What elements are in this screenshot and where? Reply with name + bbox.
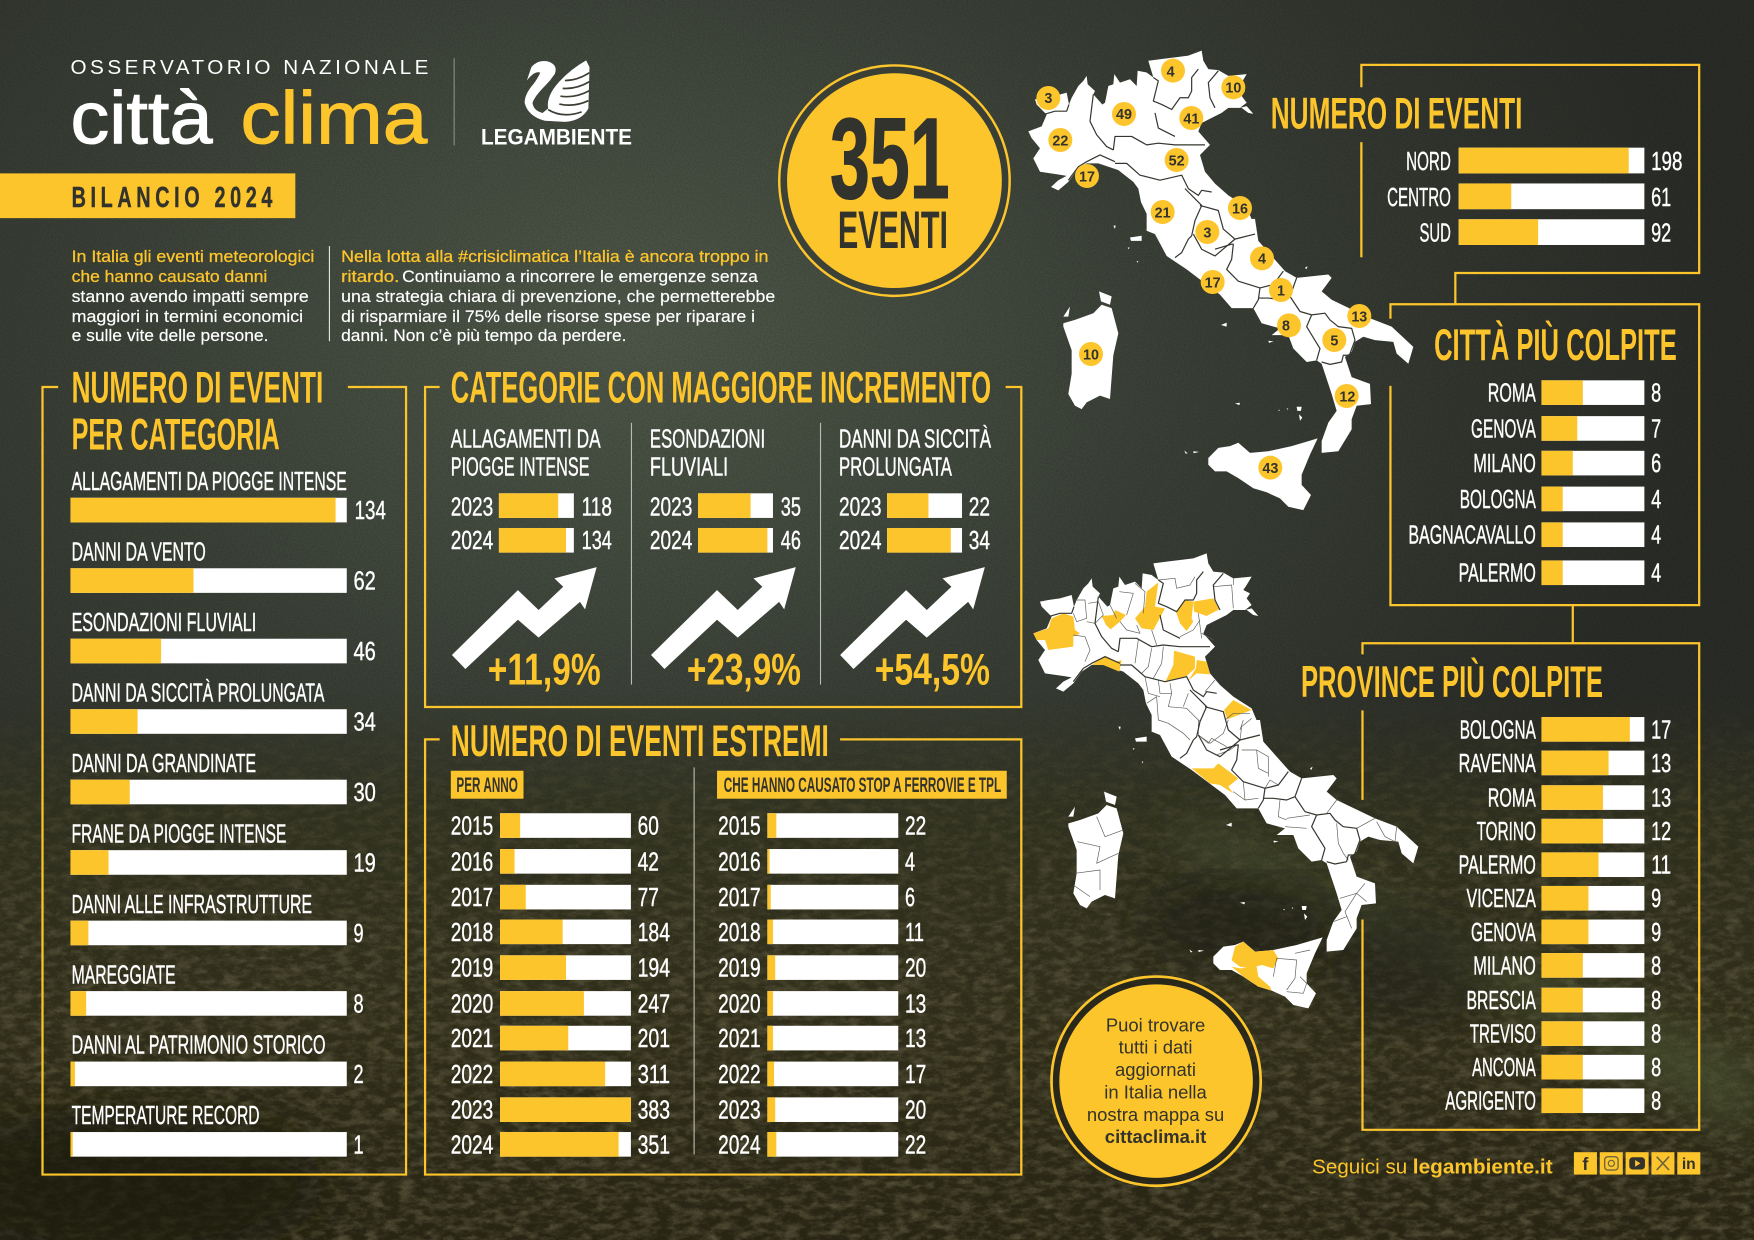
logo: Legambiente: LEGAMBIENTE <box>481 124 632 149</box>
callout: mappa cittaclima.it: cittaclima.it <box>1105 1126 1206 1147</box>
markers: 10 <box>1083 347 1099 363</box>
Sardinia <box>1068 792 1123 908</box>
bar: roma <box>1488 785 1671 813</box>
bar: allagamenti <box>70 468 386 525</box>
bar: vicenza <box>1467 885 1661 913</box>
social icons: in <box>1682 1156 1696 1173</box>
bar: palermo: 4 <box>1651 560 1661 588</box>
text block: intro right: ritardo. <box>341 268 399 286</box>
chart: eventi per anno: 311 <box>638 1061 670 1089</box>
column: esondazioni: 46 <box>781 527 801 555</box>
province borders south <box>1198 720 1397 993</box>
column: allagamenti: 118 <box>582 494 612 522</box>
chart: eventi per anno: 2019 <box>451 955 493 983</box>
arrow <box>840 567 985 669</box>
bar: frane <box>70 820 376 877</box>
chart: stop ferrovie e TPL: 2019 <box>718 955 761 983</box>
markers <box>1036 59 1371 480</box>
panel: numero di eventi per categoria <box>43 363 406 1175</box>
bar: roma <box>1488 380 1661 408</box>
bar: patrimonio storico: DANNI AL PATRIMONIO STORICO <box>72 1032 326 1060</box>
region borders south <box>1220 745 1360 864</box>
bar: ravenna: RAVENNA <box>1459 750 1536 778</box>
bar: centro: CENTRO <box>1387 184 1451 212</box>
text block: intro right: di risparmiare il 75% delle risorse spese per riparare i <box>341 308 755 326</box>
bar: mareggiate: MAREGGIATE <box>72 961 176 989</box>
text block: intro left: che hanno causato danni <box>72 268 267 286</box>
chart: eventi per anno: 77 <box>638 884 659 912</box>
bar: genova: 7 <box>1651 415 1661 443</box>
bar: nord: 198 <box>1651 148 1682 176</box>
markers: 12 <box>1339 389 1355 405</box>
tag: stop ferrovie <box>717 771 1007 799</box>
column: allagamenti: +11,9% <box>488 645 601 695</box>
chart: eventi per anno: 60 <box>638 812 659 840</box>
bar: palermo: PALERMO <box>1459 560 1536 588</box>
column: esondazioni: FLUVIALI <box>650 453 728 481</box>
heading: NUMERO DI EVENTI <box>72 363 323 413</box>
bar: siccità: 34 <box>353 708 376 736</box>
bar: palermo <box>1459 852 1671 880</box>
chart: stop ferrovie e TPL: 2018 <box>718 919 761 947</box>
column: siccità: +54,5% <box>875 645 990 695</box>
logo: Osservatorio Nazionale Città Clima: città <box>70 77 214 160</box>
bar: sud <box>1420 219 1671 248</box>
banner: Bilancio 2024 <box>0 173 295 218</box>
bar: mareggiate <box>70 961 364 1018</box>
bar: infrastrutture: 9 <box>353 920 364 948</box>
text block: intro left <box>72 248 314 345</box>
chart: eventi per anno: 2024 <box>451 1131 493 1159</box>
callout: mappa cittaclima.it <box>1052 977 1261 1186</box>
chart: stop ferrovie e TPL: 2020 <box>718 990 761 1018</box>
chart: eventi per anno: 383 <box>638 1097 670 1125</box>
heading: NUMERO DI EVENTI ESTREMI <box>451 716 829 766</box>
chart: stop ferrovie e TPL: 17 <box>905 1061 926 1089</box>
mainland south <box>1152 720 1418 952</box>
bar: bologna: BOLOGNA <box>1460 716 1536 744</box>
province borders Sardinia <box>1073 817 1123 897</box>
callout: mappa cittaclima.it: tutti i dati <box>1119 1037 1192 1058</box>
bar: esondazioni: 46 <box>353 638 376 666</box>
heading <box>72 363 323 460</box>
bar: milano: MILANO <box>1473 952 1536 980</box>
chart: eventi per anno: 184 <box>638 919 670 947</box>
highlighted provinces Sicily <box>1232 942 1278 991</box>
bar: vento: DANNI DA VENTO <box>72 538 206 566</box>
bar: bologna: 17 <box>1651 716 1671 744</box>
column: siccità <box>839 424 992 695</box>
chart: eventi per anno <box>451 812 670 1159</box>
bar: palermo: 11 <box>1651 852 1671 880</box>
bar: frane: 19 <box>353 849 376 877</box>
footer: seguici su: Seguici su <box>1312 1156 1407 1178</box>
column: siccità: 34 <box>969 527 990 555</box>
bar: brescia <box>1467 987 1661 1015</box>
markers: 21 <box>1155 205 1171 221</box>
text block: intro right: danni. Non c’è più tempo da perdere. <box>341 327 626 345</box>
chart: eventi per anno: 194 <box>638 955 670 983</box>
chart: stop ferrovie e TPL: 11 <box>905 919 924 947</box>
bar: genova: 9 <box>1651 919 1661 947</box>
province borders north <box>1073 577 1252 747</box>
chart: stop ferrovie e TPL: 6 <box>905 884 915 912</box>
bar: roma: ROMA <box>1488 380 1536 408</box>
chart: eventi per anno: 2023 <box>451 1097 493 1125</box>
bar: vento: 62 <box>353 568 376 596</box>
bar: palermo: PALERMO <box>1459 852 1536 880</box>
bar: genova: GENOVA <box>1471 919 1536 947</box>
bar: agrigento: 8 <box>1651 1088 1661 1116</box>
text block: intro right: Nella lotta alla #crisiclimatica l’Italia è ancora troppo in <box>341 248 768 266</box>
chart: stop ferrovie e TPL: 2016 <box>718 848 761 876</box>
tag: per anno <box>451 771 524 799</box>
logo: Osservatorio Nazionale Città Clima <box>70 56 428 160</box>
panel: numero di eventi per area <box>1271 65 1699 304</box>
bar: treviso: 8 <box>1651 1021 1661 1049</box>
chart: eventi per anno: 247 <box>638 990 670 1018</box>
column: esondazioni <box>650 425 801 695</box>
mainland north <box>1033 553 1260 732</box>
bar: temperature record: 1 <box>353 1131 364 1159</box>
bar: agrigento: AGRIGENTO <box>1445 1088 1536 1116</box>
bar: bologna <box>1460 486 1661 514</box>
chart: stop ferrovie e TPL <box>718 812 926 1159</box>
bar: grandinate: DANNI DA GRANDINATE <box>72 750 256 778</box>
column: esondazioni: +23,9% <box>687 645 801 695</box>
bar: nord <box>1406 148 1682 176</box>
bar: roma: ROMA <box>1488 785 1536 813</box>
heading: NUMERO DI EVENTI <box>1271 89 1522 139</box>
bar: bologna <box>1460 716 1671 744</box>
bar: brescia: 8 <box>1651 987 1661 1015</box>
text block: intro left: stanno avendo impatti sempre <box>72 288 309 306</box>
markers: 22 <box>1052 133 1068 149</box>
chart: stop ferrovie e TPL: 22 <box>905 812 926 840</box>
logo: Osservatorio Nazionale Città Clima: OSSERVATORIO NAZIONALE <box>70 56 428 79</box>
bar: bagnacavallo: 4 <box>1651 522 1661 550</box>
bar: siccità: DANNI DA SICCITÀ PROLUNGATA <box>72 678 325 707</box>
text block: intro right: Continuiamo a rincorrere le emergenze senza <box>402 268 759 286</box>
panel: numero di eventi estremi <box>425 716 1021 1175</box>
bar: infrastrutture: DANNI ALLE INFRASTRUTTURE <box>72 891 312 919</box>
bar: allagamenti: 134 <box>355 497 386 525</box>
bar: bologna: BOLOGNA <box>1460 486 1536 514</box>
bar: bologna: 4 <box>1651 486 1661 514</box>
text block: intro left: In Italia gli eventi meteorologici <box>72 248 314 266</box>
column: allagamenti <box>451 425 612 695</box>
panel: città più colpite <box>1390 304 1699 643</box>
big circle: 351 eventi <box>779 65 1010 296</box>
chart: eventi per anno: 2016 <box>451 848 493 876</box>
text block: intro left: maggiori in termini economici <box>72 308 303 326</box>
bar: bagnacavallo: BAGNACAVALLO <box>1408 522 1536 550</box>
markers: 16 <box>1232 201 1248 217</box>
chart: stop ferrovie e TPL: 2024 <box>718 1131 761 1159</box>
bar: torino <box>1477 818 1671 846</box>
bar: genova: GENOVA <box>1471 415 1536 443</box>
column: siccità: 2024 <box>839 527 881 555</box>
bar: torino: TORINO <box>1477 818 1536 846</box>
bar: sud: SUD <box>1420 220 1451 248</box>
column: allagamenti: 2024 <box>451 527 493 555</box>
highlighted provinces north <box>1033 582 1252 793</box>
chart: stop ferrovie e TPL: 22 <box>905 1131 926 1159</box>
chart: eventi per anno: 2017 <box>451 884 493 912</box>
chart: eventi per anno: 2022 <box>451 1061 493 1089</box>
column: siccità: 2023 <box>839 494 881 522</box>
callout: mappa cittaclima.it: nostra mappa su <box>1087 1104 1224 1125</box>
markers: 3 <box>1203 225 1211 241</box>
column: siccità: 22 <box>969 494 990 522</box>
bar: patrimonio storico: 2 <box>353 1061 364 1089</box>
chart: stop ferrovie e TPL: 2015 <box>718 812 761 840</box>
heading: PER CATEGORIA <box>72 410 280 460</box>
chart: stop ferrovie e TPL: 20 <box>905 1097 926 1125</box>
map: events per region <box>1028 51 1413 510</box>
bar: frane: FRANE DA PIOGGE INTENSE <box>72 820 286 848</box>
markers: 4 <box>1167 64 1175 80</box>
region borders north <box>1048 572 1260 758</box>
bar: grandinate <box>70 750 376 807</box>
markers: 17 <box>1079 169 1095 185</box>
chart: stop ferrovie e TPL: 13 <box>905 990 926 1018</box>
bar: milano: MILANO <box>1473 450 1536 478</box>
text block: intro right <box>341 248 775 345</box>
bar: treviso: TREVISO <box>1470 1021 1536 1049</box>
bar: sud: 92 <box>1651 220 1671 248</box>
chart: eventi per anno: 2018 <box>451 919 493 947</box>
text block: intro right: una strategia chiara di prevenzione, che permetterebbe <box>341 288 775 306</box>
text block: intro left: e sulle vite delle persone. <box>72 327 268 345</box>
bar: nord: NORD <box>1406 148 1451 176</box>
chart: stop ferrovie e TPL: 20 <box>905 955 926 983</box>
footer: seguici su <box>1312 1156 1553 1178</box>
bar: milano <box>1473 952 1661 980</box>
column: allagamenti: ALLAGAMENTI DA <box>451 425 601 453</box>
chart: eventi per anno: 351 <box>638 1131 670 1159</box>
column: allagamenti: PIOGGE INTENSE <box>451 453 590 481</box>
bar: vento <box>70 538 376 596</box>
arrow <box>651 567 796 669</box>
markers: 5 <box>1330 333 1338 349</box>
chart: stop ferrovie e TPL: 2017 <box>718 884 761 912</box>
bar: centro <box>1387 183 1671 212</box>
column: esondazioni: 2024 <box>650 527 692 555</box>
bar: esondazioni <box>70 609 376 666</box>
footer: seguici su: legambiente.it <box>1413 1156 1553 1178</box>
bar: esondazioni: ESONDAZIONI FLUVIALI <box>72 609 256 637</box>
Sicily <box>1213 937 1323 1008</box>
column: allagamenti: 134 <box>582 527 612 555</box>
bar: brescia: BRESCIA <box>1467 987 1536 1015</box>
map: most affected provinces <box>1033 553 1418 1008</box>
big circle: 351 eventi: 351 <box>830 95 950 223</box>
markers: 4 <box>1258 252 1266 268</box>
column: esondazioni: 35 <box>781 494 801 522</box>
bar: milano: 6 <box>1651 450 1661 478</box>
arrow <box>452 567 597 669</box>
bar: roma: 13 <box>1651 785 1671 813</box>
column: allagamenti: 2023 <box>451 494 493 522</box>
logo: Osservatorio Nazionale Città Clima: clima <box>241 77 428 160</box>
bar: vicenza: VICENZA <box>1467 885 1536 913</box>
bar: genova <box>1471 919 1661 947</box>
bar: centro: 61 <box>1651 184 1671 212</box>
bar: siccità <box>70 678 376 736</box>
bar: grandinate: 30 <box>353 779 376 807</box>
chart: stop ferrovie e TPL: 2023 <box>718 1097 761 1125</box>
bar: temperature record <box>70 1102 364 1159</box>
bar: infrastrutture <box>70 891 364 948</box>
callout: mappa cittaclima.it: aggiornati <box>1115 1059 1196 1080</box>
bar: genova <box>1471 415 1661 443</box>
chart: eventi per anno: 2015 <box>451 812 493 840</box>
chart: stop ferrovie e TPL: 2021 <box>718 1025 761 1053</box>
bar: treviso <box>1470 1021 1661 1049</box>
column: esondazioni: ESONDAZIONI <box>650 425 765 453</box>
panel: categorie con maggiore incremento <box>425 363 1021 707</box>
bar: torino: 12 <box>1651 818 1671 846</box>
markers: 43 <box>1262 461 1278 477</box>
bar: ravenna <box>1459 750 1671 778</box>
chart: stop ferrovie e TPL: 2022 <box>718 1061 761 1089</box>
bar: ravenna: 13 <box>1651 750 1671 778</box>
chart: eventi per anno: 2020 <box>451 990 493 1018</box>
markers: 52 <box>1169 153 1185 169</box>
markers: 1 <box>1277 283 1285 299</box>
markers: 3 <box>1044 91 1052 107</box>
bar: milano: 8 <box>1651 952 1661 980</box>
markers: 49 <box>1116 107 1132 123</box>
bar: ancona: ANCONA <box>1472 1054 1536 1082</box>
callout: mappa cittaclima.it: in Italia nella <box>1104 1081 1208 1102</box>
heading: CATEGORIE CON MAGGIORE INCREMENTO <box>451 363 991 413</box>
small islands <box>1118 727 1313 952</box>
big circle: 351 eventi: EVENTI <box>838 201 948 260</box>
column: siccità: PROLUNGATA <box>839 453 952 481</box>
bar: ancona <box>1472 1054 1661 1082</box>
tag: per anno: PER ANNO <box>456 773 518 797</box>
bar: milano <box>1473 450 1661 478</box>
bar: patrimonio storico <box>70 1032 364 1089</box>
chart: eventi per anno: 201 <box>638 1025 670 1053</box>
logo: Legambiente <box>481 60 632 149</box>
silhouette and region borders <box>1028 51 1413 510</box>
bar: ancona: 8 <box>1651 1054 1661 1082</box>
banner: Bilancio 2024: BILANCIO 2024 <box>72 181 273 214</box>
chart: eventi per anno: 2021 <box>451 1025 493 1053</box>
markers: 17 <box>1205 275 1221 291</box>
bar: temperature record: TEMPERATURE RECORD <box>72 1102 260 1130</box>
bar: palermo <box>1459 560 1661 588</box>
bar: allagamenti: ALLAGAMENTI DA PIOGGE INTENSE <box>72 468 347 496</box>
column: esondazioni: 2023 <box>650 494 692 522</box>
callout: mappa cittaclima.it: Puoi trovare <box>1106 1014 1205 1035</box>
markers: 10 <box>1225 81 1241 97</box>
social icons: f <box>1582 1154 1588 1174</box>
markers: 8 <box>1282 319 1290 335</box>
chart: eventi per anno: 42 <box>638 848 659 876</box>
bar: vicenza: 9 <box>1651 885 1661 913</box>
social icons <box>1574 1152 1700 1175</box>
chart: stop ferrovie e TPL: 4 <box>905 848 915 876</box>
bar: roma: 8 <box>1651 380 1661 408</box>
markers: 13 <box>1351 309 1367 325</box>
column: siccità: DANNI DA SICCITÀ <box>839 424 992 453</box>
bar: mareggiate: 8 <box>353 990 364 1018</box>
chart: stop ferrovie e TPL: 13 <box>905 1025 926 1053</box>
tag: stop ferrovie: CHE HANNO CAUSATO STOP A FERROVIE E TPL <box>724 773 1001 797</box>
markers: 41 <box>1183 111 1199 127</box>
panel: province più colpite <box>1301 643 1699 1130</box>
